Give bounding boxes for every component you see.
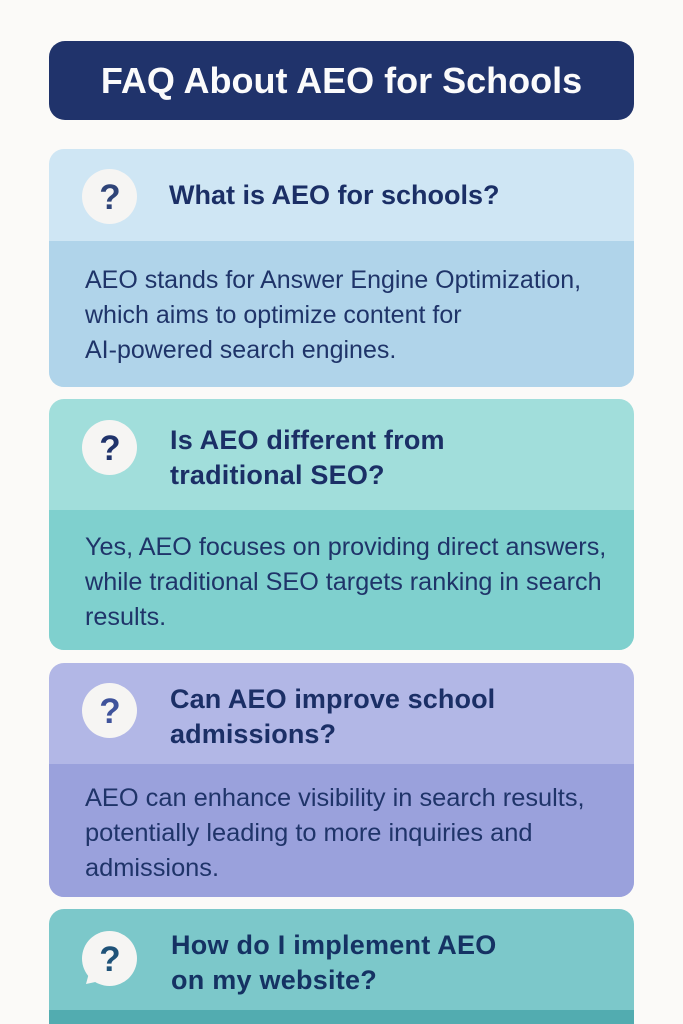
answer text: AEO stands for Answer Engine Optimization, [85, 266, 581, 294]
panel: AEO vs SEO [49, 399, 634, 650]
answer text: AEO can enhance visibility in search results, [85, 784, 585, 812]
answer band [49, 241, 634, 387]
answer text [85, 266, 581, 364]
question heading: Can AEO improve school [170, 684, 495, 714]
answer text: while traditional SEO targets ranking in search [85, 568, 602, 596]
icon: question bubble [82, 420, 137, 475]
answer text: Yes, AEO focuses on providing direct answers, [85, 533, 606, 561]
answer text: admissions. [85, 854, 219, 882]
answer text: potentially leading to more inquiries and [85, 819, 532, 847]
answer band [49, 510, 634, 650]
panel: implementation [49, 909, 634, 1024]
answer text: AI-powered search engines. [85, 336, 396, 364]
question heading [170, 425, 445, 490]
panel: admissions [49, 663, 634, 897]
question heading: Is AEO different from [170, 425, 445, 455]
title banner [49, 41, 634, 120]
question heading: admissions? [170, 719, 336, 749]
panel: what is AEO [49, 149, 634, 387]
question heading: on my website? [171, 965, 377, 995]
answer text [85, 784, 585, 882]
answer text [85, 533, 606, 631]
icon: speech bubble question [82, 931, 137, 986]
answer band [49, 1010, 634, 1024]
icon: question bubble [82, 169, 137, 224]
icon: question bubble: ? [99, 429, 121, 468]
question heading [171, 930, 497, 995]
icon: question bubble: ? [99, 692, 121, 731]
title text: FAQ About AEO for Schools [101, 60, 582, 101]
icon: question bubble [82, 683, 137, 738]
answer text: results. [85, 603, 166, 631]
icon: question bubble: ? [99, 178, 121, 217]
question heading: How do I implement AEO [171, 930, 497, 960]
answer text: which aims to optimize content for [85, 301, 462, 329]
question heading: What is AEO for schools? [169, 180, 500, 210]
icon: speech bubble question: ? [99, 940, 121, 979]
question heading [170, 684, 495, 749]
question heading: traditional SEO? [170, 460, 385, 490]
answer band [49, 764, 634, 897]
